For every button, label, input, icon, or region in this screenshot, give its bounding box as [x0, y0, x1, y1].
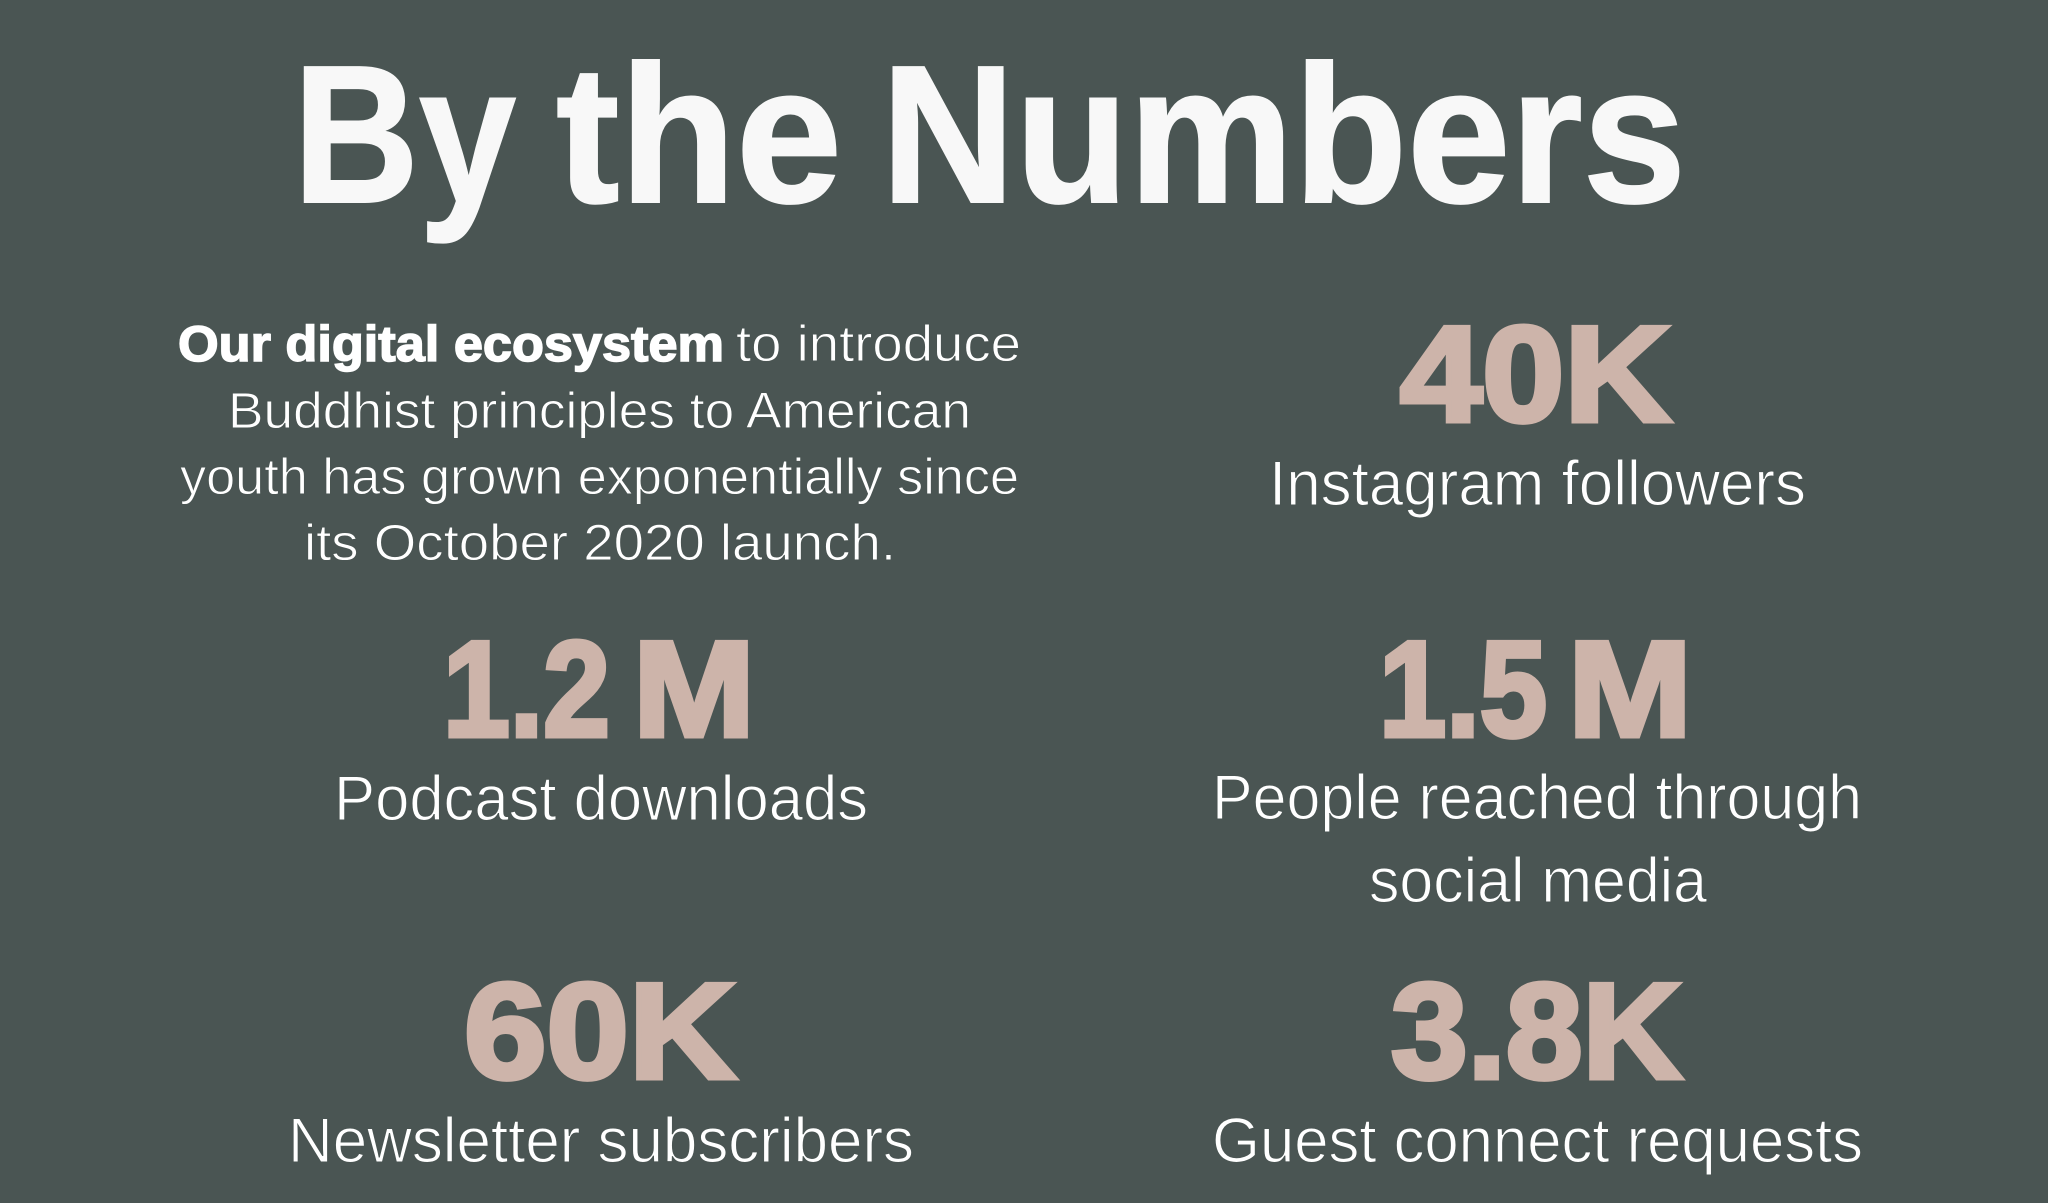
stat: People reached through social media: M: [1568, 613, 1692, 765]
stat: Newsletter subscribers: 60K: [464, 955, 736, 1107]
stat: Guest connect requests: Guest connect requests: [1212, 1106, 1863, 1176]
intro paragraph: [178, 315, 1021, 571]
stat: Guest connect requests: 3.8K: [1391, 955, 1682, 1107]
stat: Podcast downloads: M: [633, 613, 755, 765]
stat: People reached through social media: 1.5: [1379, 613, 1547, 765]
stat: Podcast downloads: 1.2: [443, 613, 610, 765]
intro paragraph: Buddhist principles to American: [228, 382, 971, 439]
title: Numbers: [881, 25, 1686, 244]
stat: Podcast downloads: Podcast downloads: [334, 764, 868, 834]
intro paragraph: Our digital ecosystem: [178, 316, 724, 372]
stat: Podcast downloads: [334, 613, 868, 834]
stat: Instagram followers: [1269, 298, 1806, 519]
intro paragraph: to introduce: [736, 315, 1021, 372]
stat: Instagram followers: Instagram followers: [1269, 449, 1806, 519]
stat: Instagram followers: 40K: [1400, 298, 1671, 450]
title: By: [293, 25, 516, 244]
stat: Newsletter subscribers: [288, 955, 914, 1176]
stat: People reached through social media: [1212, 613, 1862, 916]
intro paragraph: youth has grown exponentially since: [180, 448, 1019, 505]
title: the: [556, 25, 842, 244]
stat: Guest connect requests: [1212, 955, 1863, 1176]
stat: Newsletter subscribers: Newsletter subscribers: [288, 1106, 914, 1176]
stat: People reached through social media: People reached through: [1212, 763, 1862, 833]
stat: People reached through social media: social media: [1369, 846, 1708, 916]
intro paragraph: its October 2020 launch.: [304, 514, 896, 571]
